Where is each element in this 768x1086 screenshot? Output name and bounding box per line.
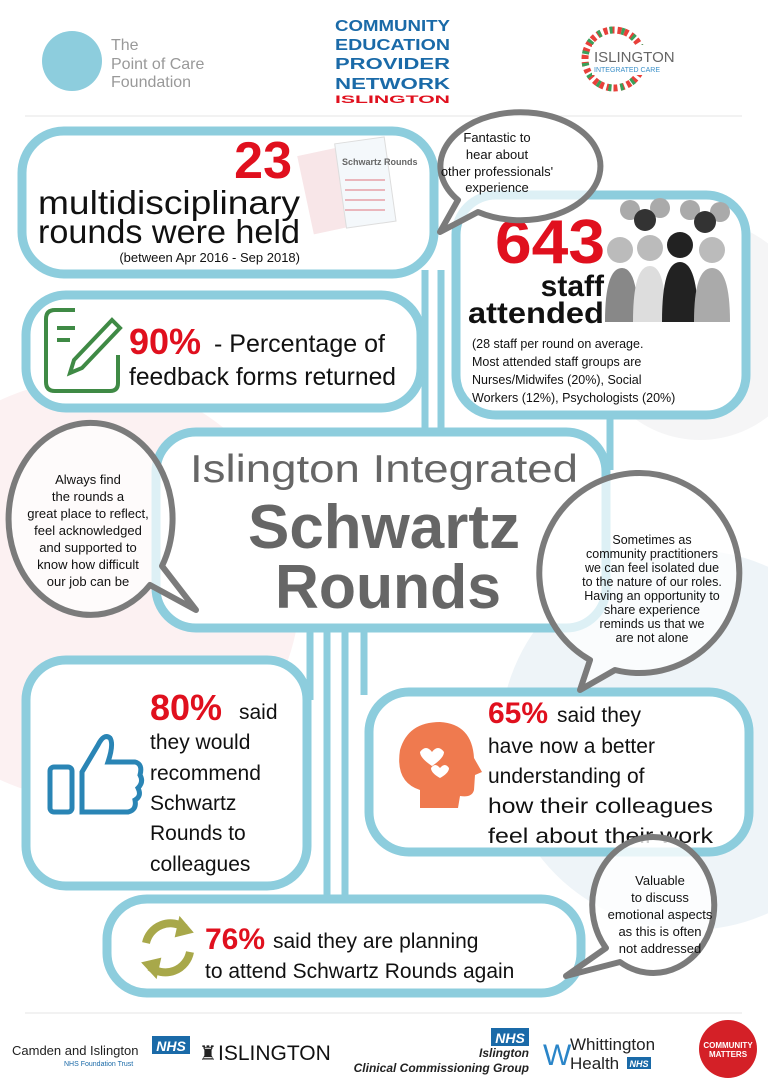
panel: 643 staff: 643: [495, 208, 605, 277]
footer logos: Camden and Islington: [12, 1043, 138, 1058]
panel: central title: Rounds: [275, 553, 501, 622]
footer logos: Clinical Commissioning Group: [354, 1061, 529, 1075]
panel: 80%: colleagues: [150, 853, 250, 876]
panel: 80%: Rounds to: [150, 822, 246, 845]
logo: CEPN: [335, 18, 451, 106]
panel: 643 staff: (28 staff per round on average.: [472, 337, 643, 351]
panel: 65%: [369, 692, 749, 852]
footer logos: MATTERS: [709, 1050, 748, 1059]
speech bubble: valuable: not addressed: [619, 941, 701, 956]
panel: 80%: 80%: [150, 687, 222, 728]
logo: CEPN: NETWORK: [335, 76, 451, 93]
footer logos: W: [543, 1039, 572, 1072]
speech bubble: always find: great place to reflect,: [27, 506, 149, 521]
speech bubble: always find: feel acknowledged: [34, 523, 142, 538]
footer logos: NHS Foundation Trust: [64, 1061, 133, 1068]
panel: 23 rounds: [22, 131, 434, 274]
logo: Islington integrated care: [585, 30, 682, 88]
background decorations: [0, 220, 768, 930]
icon: posters: [297, 137, 418, 234]
speech bubble: valuable: to discuss: [631, 890, 689, 905]
panel: 76%: to attend Schwartz Rounds again: [205, 960, 514, 983]
logo: point of care foundation: Point of Care: [111, 56, 204, 73]
speech bubble: fantastic: Fantastic to: [463, 130, 531, 145]
footer logos: NHS: [629, 1059, 649, 1069]
panel: 80%: recommend: [150, 762, 261, 785]
speech bubble: valuable: emotional aspects: [608, 907, 713, 922]
logo: point of care foundation: [42, 31, 204, 91]
speech bubble: always find: know how difficult: [37, 557, 139, 572]
speech bubble: always find: Always find: [55, 472, 121, 487]
panel: 65%: said they: [557, 704, 642, 727]
icon: pencil form: [46, 310, 120, 391]
panel: 90%: feedback forms returned: [129, 363, 396, 391]
speech bubble: sometimes: are not alone: [616, 631, 689, 645]
footer logos: COMMUNITY: [703, 1041, 753, 1050]
speech bubble: sometimes: to the nature of our roles.: [582, 575, 722, 589]
footer logos: ♜: [199, 1043, 217, 1065]
icon: recycle arrows: [143, 918, 192, 977]
panel: 23 rounds: rounds were held: [38, 213, 300, 250]
panel: 76%: said they are planning: [273, 930, 478, 953]
speech bubble: fantastic: hear about: [466, 147, 528, 162]
connectors: [310, 270, 610, 900]
panel: 23 rounds: 23: [234, 132, 292, 190]
footer logos: [12, 1020, 757, 1078]
logo: Islington integrated care: ISLINGTON: [594, 49, 675, 66]
panel: 76%: 76%: [205, 923, 265, 956]
logo: Islington integrated care: INTEGRATED CARE: [594, 67, 660, 74]
panel: central title: Schwartz: [248, 493, 520, 562]
panel: 80%: Schwartz: [150, 792, 236, 815]
footer logos: NHS: [495, 1030, 525, 1046]
panel: central title: [156, 432, 606, 628]
panel: central title: Islington Integrated: [190, 448, 578, 491]
icon: people crowd: [605, 198, 730, 322]
speech bubble: sometimes: [539, 473, 739, 690]
panel: 90%: 90%: [129, 321, 201, 362]
speech bubble: always find: the rounds a: [52, 489, 125, 504]
panel: 643 staff: attended: [468, 297, 604, 330]
panel: 23 rounds: multidisciplinary: [38, 184, 301, 221]
icon: head with hearts: [399, 722, 482, 808]
speech bubble: fantastic: other professionals': [441, 164, 553, 179]
logo: point of care foundation: Foundation: [111, 74, 191, 91]
panel: 65%: have now a better: [488, 735, 655, 758]
logo: CEPN: EDUCATION: [335, 37, 450, 54]
panel: 643 staff: staff: [541, 270, 605, 303]
panel: 80%: said: [239, 701, 278, 724]
speech bubble: fantastic: [440, 112, 600, 232]
footer logos: NHS: [156, 1038, 186, 1054]
panel: 80%: [26, 660, 307, 886]
speech bubble: always find: our job can be: [47, 574, 129, 589]
icon: thumbs up: [50, 737, 142, 812]
speech bubble: sometimes: reminds us that we: [600, 617, 704, 631]
logo: point of care foundation: The: [111, 37, 139, 54]
logo: CEPN: PROVIDER: [335, 56, 451, 73]
panel: 23 rounds: (between Apr 2016 - Sep 2018): [119, 250, 300, 265]
logo: CEPN: ISLINGTON: [335, 94, 450, 106]
panel: 643 staff: [456, 195, 746, 415]
speech bubble: sometimes: share experience: [604, 603, 700, 617]
panel: 90%: [26, 295, 421, 408]
speech bubble: sometimes: community practitioners: [586, 547, 718, 561]
footer logos: ISLINGTON: [218, 1042, 331, 1065]
speech bubble: valuable: Valuable: [635, 873, 685, 888]
panel: 643 staff: Workers (12%), Psychologists (20%): [472, 391, 675, 405]
panel: 643 staff: Nurses/Midwifes (20%), Social: [472, 373, 642, 387]
icon: posters: Schwartz Rounds: [342, 157, 418, 167]
logo: CEPN: COMMUNITY: [335, 18, 450, 35]
speech bubble: always find: [9, 423, 196, 615]
panel: 65%: how their colleagues: [488, 795, 713, 818]
footer logos: Health: [570, 1054, 619, 1073]
speech bubble: sometimes: Having an opportunity to: [584, 589, 720, 603]
speech bubble: sometimes: Sometimes as: [612, 533, 692, 547]
speech bubble: sometimes: we can feel isolated due: [584, 561, 719, 575]
speech bubble: valuable: as this is often: [618, 924, 702, 939]
footer logos: Whittington: [570, 1035, 655, 1054]
panel: 643 staff: Most attended staff groups are: [472, 355, 641, 369]
speech bubble: valuable: [566, 837, 714, 976]
footer logos: Islington: [479, 1046, 529, 1060]
panel: 76%: [107, 899, 581, 993]
panel: 65%: 65%: [488, 697, 548, 730]
panel: 90%: - Percentage of: [214, 330, 385, 358]
panel: 65%: feel about their work: [488, 825, 714, 848]
panel: 80%: they would: [150, 731, 250, 754]
speech bubble: always find: and supported to: [39, 540, 137, 555]
panel: 65%: understanding of: [488, 765, 645, 788]
speech bubble: fantastic: experience: [465, 180, 529, 195]
